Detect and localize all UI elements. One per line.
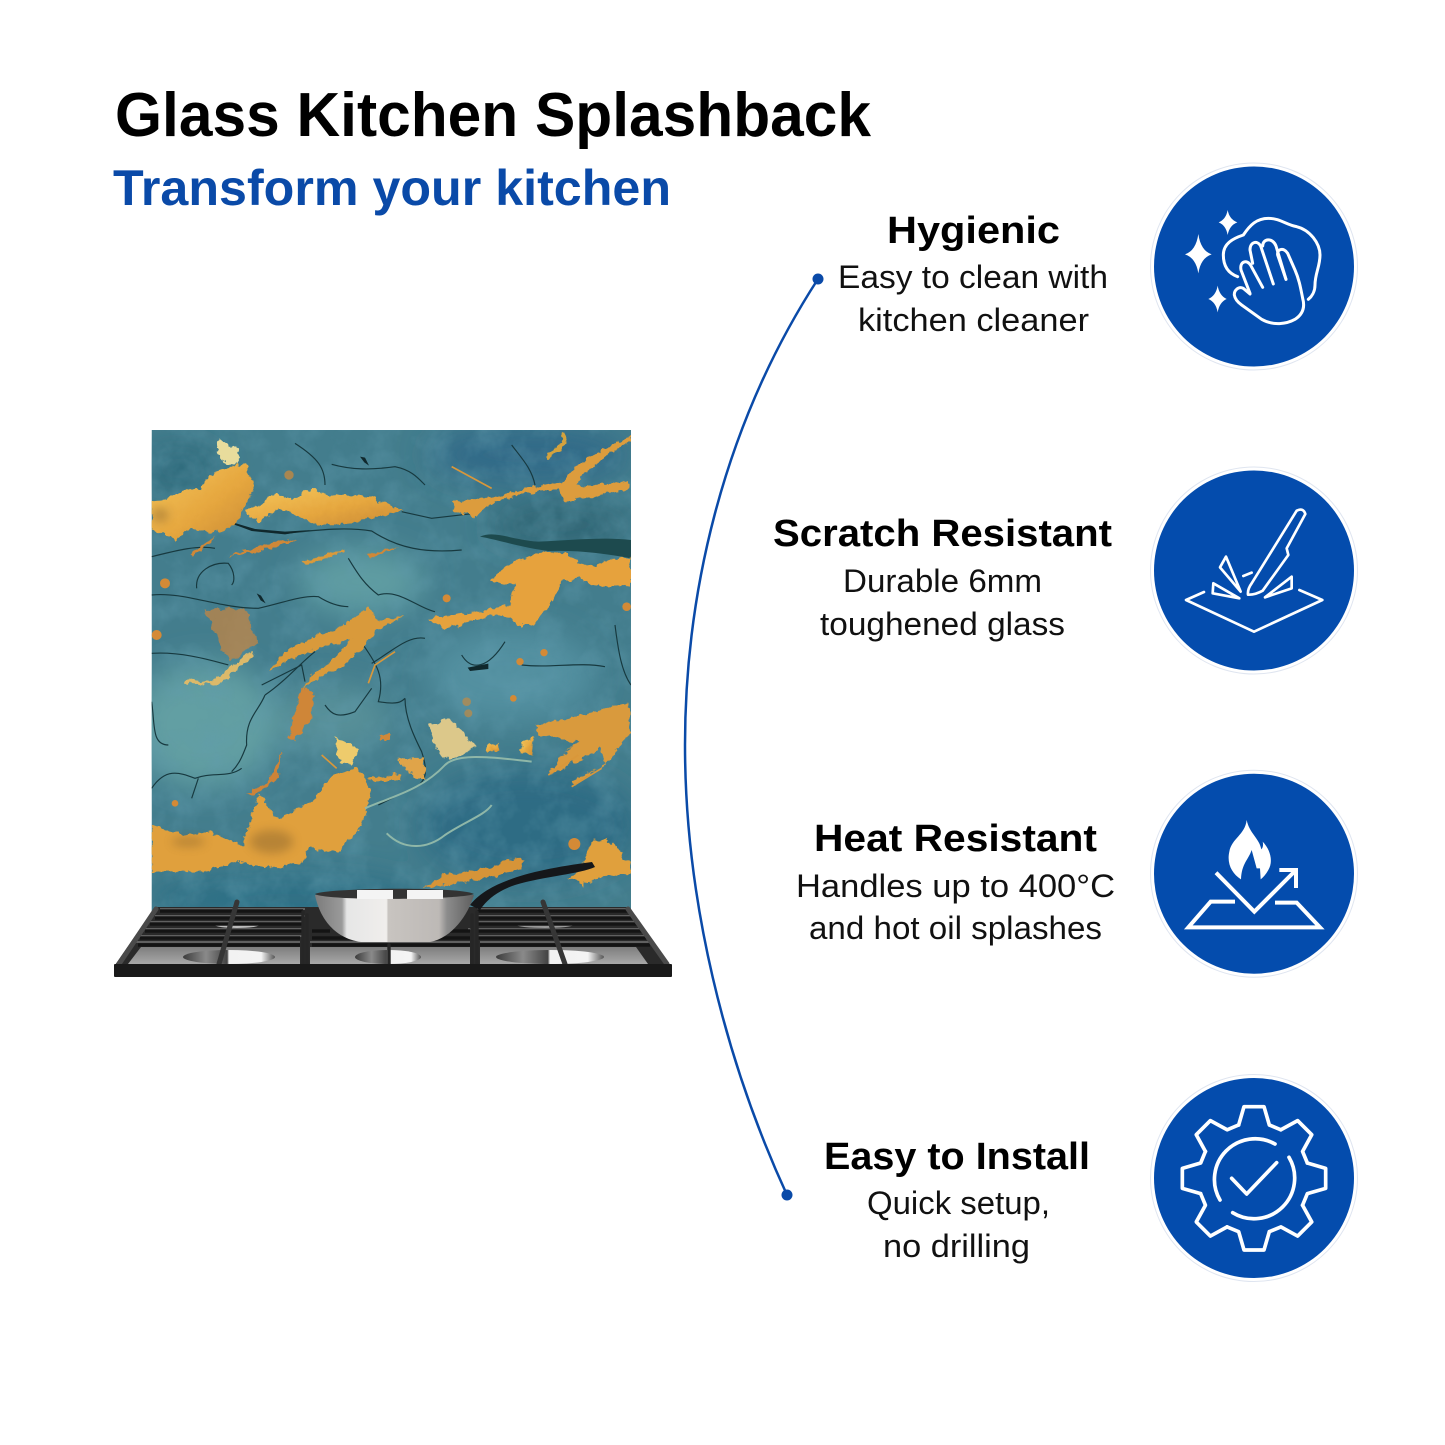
pan handle: [470, 862, 595, 910]
front edge: [114, 964, 672, 977]
heading: Heat Resistant: [814, 818, 1097, 860]
brown speckle on gold: [151, 508, 293, 853]
product image: pan: [315, 862, 595, 942]
product image: gas hob: [114, 902, 672, 977]
pan rim: [315, 889, 474, 899]
steel panels: [128, 947, 648, 964]
feature: Heat Resistant: and hot oil splashes: [809, 910, 1102, 946]
product image: marble splashback: [132, 425, 638, 925]
feature: Easy to Install: no drilling: [883, 1228, 1030, 1264]
connector curve: [685, 279, 818, 1195]
feature: Heat Resistant: [796, 818, 1115, 946]
description: Quick setup,: [867, 1185, 1050, 1221]
marble veins: [152, 443, 631, 805]
heading: Easy to Install: [824, 1136, 1090, 1178]
description: Durable 6mm: [843, 563, 1042, 599]
feature: Scratch Resistant: toughened glass: [820, 606, 1065, 642]
connector dot top: [812, 274, 824, 284]
description: Handles up to 400°C: [796, 868, 1115, 904]
icon: flame on surface: [1150, 770, 1358, 977]
burners: [183, 922, 604, 964]
title: Glass Kitchen Splashback: [115, 81, 871, 150]
dark vein: [480, 534, 631, 558]
icon: gear with check: [1150, 1074, 1358, 1282]
connector dot bottom: [782, 1190, 792, 1200]
feature: Hygienic: [838, 210, 1108, 338]
description: Easy to clean with: [838, 259, 1108, 295]
icon: scalpel scratching glass: [1150, 467, 1358, 674]
icon: cleaning hand: [1150, 163, 1358, 370]
heavy crack marks: [213, 457, 488, 671]
feature: Hygienic: kitchen cleaner: [858, 302, 1089, 338]
feature: Scratch Resistant: [773, 513, 1112, 642]
subtitle: Transform your kitchen: [113, 160, 671, 216]
gold spots: [152, 470, 631, 850]
thin gold veins: [322, 467, 602, 787]
pan supports: highlight: [135, 909, 650, 942]
pan supports: frame and uprights: [119, 902, 667, 964]
feature: Easy to Install: [824, 1136, 1090, 1264]
heading: Scratch Resistant: [773, 513, 1112, 555]
pan body: [315, 895, 474, 942]
gold deposits: [152, 432, 631, 887]
pan supports: bars: [138, 911, 650, 945]
pale vein: [365, 757, 532, 846]
heading: Hygienic: [887, 210, 1060, 252]
hob body: [115, 907, 670, 965]
